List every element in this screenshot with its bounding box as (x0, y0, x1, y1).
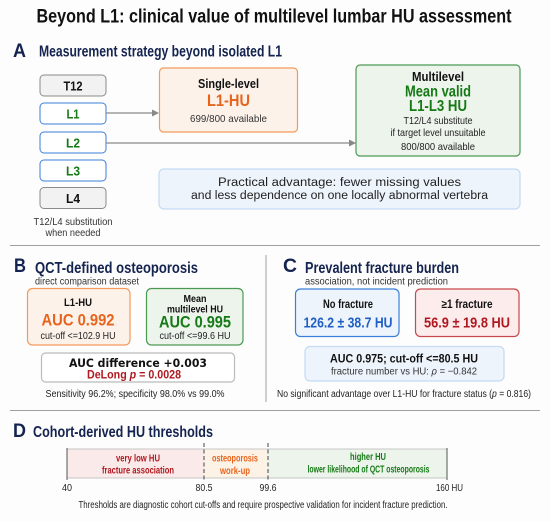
AUC difference box (42, 353, 234, 382)
mean multilevel HU box (146, 288, 243, 345)
subheading B: direct comparison dataset (35, 276, 139, 288)
vertebra T12 (40, 75, 106, 96)
no fracture box (296, 289, 399, 336)
zone: very low HU (102, 454, 174, 476)
scale labels: 160 HU (436, 483, 463, 494)
no fracture box: No fracture (323, 299, 373, 311)
scale labels: 99.6 (260, 483, 277, 494)
single-level box: 699/800 available (190, 113, 267, 125)
AUC and correlation callout: AUC 0.975; cut-off <=80.5 HU (330, 352, 478, 366)
zone: very low HU: very low HU (116, 454, 160, 464)
single-level box: Single-level (198, 76, 259, 91)
fracture box: ≥1 fracture (442, 299, 492, 311)
zone: osteoporosis work-up (212, 454, 258, 477)
fracture box: 56.9 ± 19.8 HU (424, 316, 510, 332)
multilevel box (356, 65, 520, 156)
mean multilevel HU box: Mean (184, 293, 206, 305)
mean multilevel HU box: multilevel HU (167, 304, 223, 316)
heading D: Cohort-derived HU thresholds (33, 424, 213, 441)
AUC and correlation callout: fracture number vs HU: ρ = −0.842 (331, 366, 477, 378)
multilevel box: 800/800 available (401, 141, 475, 153)
practical advantage callout (159, 169, 520, 209)
vertebra L3 (40, 160, 106, 181)
substitution note: T12/L4 substitution (34, 217, 112, 228)
zone: very low HU: fracture association (102, 466, 174, 476)
multilevel box: T12/L4 substitute (404, 115, 473, 127)
subheading C: association, not incident prediction (305, 276, 448, 288)
L1-HU box (28, 288, 130, 345)
no advantage note: No significant advantage over L1-HU for fracture status (p = 0.816) (277, 389, 531, 400)
L1-HU box: AUC 0.992 (42, 312, 114, 330)
zone: higher HU: higher HU (350, 452, 386, 463)
arrow: L2 to multilevel (106, 140, 356, 146)
substitution note: when needed (45, 228, 100, 239)
scale labels: 40 (62, 483, 72, 494)
vertebra L3: L3 (66, 164, 80, 178)
scale labels: 80.5 (196, 483, 213, 494)
threshold scale bar (67, 443, 447, 480)
zone: osteoporosis work-up: work-up (219, 466, 250, 477)
zone: higher HU (308, 452, 430, 476)
mean multilevel HU box: cut-off <=99.6 HU (160, 331, 230, 342)
AUC difference box: AUC difference +0.003 (69, 356, 207, 370)
fracture box (416, 289, 519, 336)
L1-HU box: cut-off <=102.9 HU (40, 331, 116, 342)
multilevel box: if target level unsuitable (390, 127, 486, 139)
panel: C prevalent fracture burden (277, 256, 531, 400)
heading A: Measurement strategy beyond isolated L1 (39, 44, 282, 60)
vertebra T12: T12 (64, 78, 82, 94)
arrow: L1 to single-level (106, 110, 159, 116)
thresholds footnote: Thresholds are diagnostic cohort cut-offs and require prospective validation for incident fracture prediction. (78, 500, 448, 511)
practical advantage callout: and less dependence on one locally abnormal vertebra (191, 190, 489, 202)
single-level box (160, 68, 298, 132)
heading C: Prevalent fracture burden (305, 260, 459, 277)
vertebra L4 (40, 188, 106, 208)
vertebra L1: L1 (66, 106, 80, 122)
AUC and correlation callout (305, 346, 504, 381)
vertebra L4: L4 (66, 191, 81, 206)
panel letter C: C (283, 256, 297, 277)
panel: A measurement strategy (13, 41, 520, 239)
sensitivity and specificity note: Sensitivity 96.2%; specificity 98.0% vs 99.0% (46, 389, 225, 400)
panel: B QCT-defined osteoporosis (14, 256, 243, 400)
no fracture box: 126.2 ± 38.7 HU (304, 316, 392, 332)
zone: osteoporosis work-up: osteoporosis (212, 454, 258, 464)
zone: higher HU: lower likelihood of QCT osteoporosis (308, 464, 430, 476)
panel letter D: D (13, 421, 26, 442)
scale labels (62, 483, 463, 494)
panel letter A: A (13, 41, 26, 62)
vertebra L2: L2 (66, 136, 80, 150)
multilevel box: L1-L3 HU (409, 98, 467, 115)
practical advantage callout: Practical advantage: fewer missing values (218, 177, 461, 189)
vertebra L1 (40, 103, 106, 124)
single-level box: L1-HU (207, 92, 250, 110)
panel letter B: B (14, 256, 26, 277)
vertebra L2 (40, 132, 106, 153)
multilevel box: Mean valid (405, 84, 471, 100)
panel: D cohort-derived HU thresholds (13, 421, 463, 511)
mean multilevel HU box: AUC 0.995 (159, 314, 231, 332)
L1-HU box: L1-HU (64, 297, 92, 309)
heading B: QCT-defined osteoporosis (35, 260, 198, 277)
substitution note (34, 217, 112, 239)
multilevel box: Multilevel (412, 69, 464, 84)
AUC difference box: DeLong p = 0.0028 (87, 370, 182, 382)
